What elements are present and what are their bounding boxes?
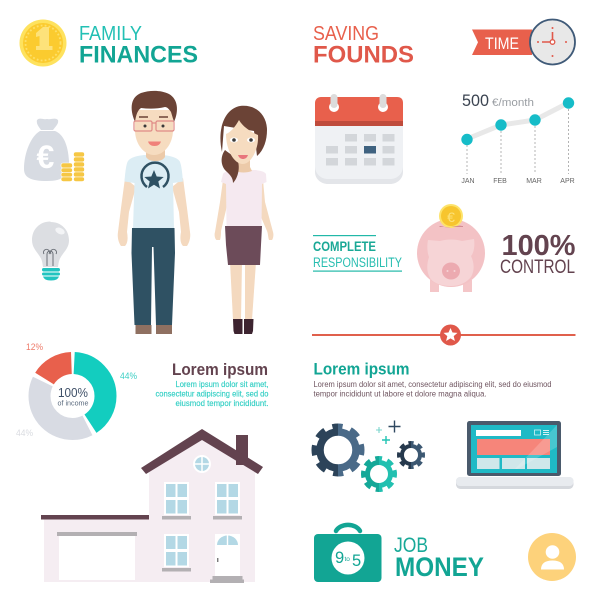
icon: piggy bank: €	[447, 209, 455, 225]
icon: piggy bank	[417, 204, 485, 292]
line chart: 500 euro per month: 500	[462, 92, 489, 110]
icon: gold coin	[20, 20, 66, 66]
text: complete responsibility: COMPLETE	[313, 239, 376, 254]
line chart: 500 euro per month: APR	[560, 178, 575, 185]
donut chart: income	[16, 342, 137, 438]
heading: family finances	[79, 22, 198, 68]
donut chart: income: of income	[58, 400, 89, 408]
windows	[164, 482, 240, 567]
door	[215, 534, 240, 576]
neck	[146, 145, 165, 161]
text: complete responsibility	[313, 235, 402, 272]
illustration: woman	[215, 106, 273, 334]
arms	[118, 178, 136, 246]
hair back and ponytail	[220, 106, 267, 156]
neck	[235, 155, 252, 172]
text block: lorem ipsum right aligned: Lorem ipsum dolor sit amet,	[176, 380, 268, 389]
heading: saving founds: FOUNDS	[313, 42, 414, 68]
heading: job money: JOB	[394, 534, 428, 557]
donut chart: income: 44%	[16, 428, 33, 438]
mouth	[148, 142, 161, 146]
icon: avatar	[528, 533, 576, 581]
donut chart: income: 12%	[26, 342, 43, 352]
text block: lorem ipsum left aligned	[314, 360, 552, 398]
icon: light bulb	[32, 222, 69, 280]
line chart: 500 euro per month	[461, 92, 575, 185]
ribbon: time	[472, 30, 532, 55]
top	[221, 170, 266, 227]
icon: money bag with coins: €	[36, 139, 54, 175]
text block: lorem ipsum right aligned: consectetur adipiscing elit, sed do	[156, 390, 269, 398]
line chart: 500 euro per month: FEB	[493, 178, 507, 185]
garage	[57, 532, 137, 536]
line chart: 500 euro per month: JAN	[461, 178, 475, 185]
heading: saving founds	[313, 22, 414, 68]
donut chart: income: 44%	[120, 371, 137, 381]
heading: job money	[394, 534, 484, 582]
glasses	[134, 121, 174, 131]
heading: family finances: FINANCES	[79, 42, 198, 68]
roof	[236, 435, 248, 465]
icon: money bag with coins	[24, 119, 84, 182]
text block: lorem ipsum right aligned: eiusmod tempor incididunt.	[176, 399, 268, 408]
heading: family finances: FAMILY	[79, 22, 142, 45]
round window	[193, 455, 211, 473]
icon: calendar	[315, 94, 403, 184]
text: 100% control: CONTROL	[500, 257, 575, 278]
eyes and lips	[230, 138, 255, 159]
line chart: 500 euro per month: MAR	[526, 178, 542, 185]
icon: briefcase 9 to 5: 5	[352, 552, 361, 570]
heading: saving founds: SAVING	[313, 22, 379, 45]
face	[226, 120, 258, 164]
text: 100% control	[500, 230, 576, 278]
text block: lorem ipsum left aligned: Lorem ipsum	[314, 360, 410, 378]
skirt	[225, 226, 262, 265]
divider with star badge	[312, 324, 576, 346]
icon: briefcase 9 to 5: to	[344, 556, 350, 563]
text block: lorem ipsum right aligned	[156, 361, 269, 408]
shirt star	[141, 163, 169, 188]
face	[135, 110, 173, 155]
icon: laptop	[456, 421, 574, 489]
icon: briefcase 9 to 5	[314, 525, 382, 582]
boots	[233, 319, 242, 334]
text: 100% control: 100%	[502, 230, 576, 262]
illustration: man	[118, 91, 190, 334]
hair	[132, 91, 177, 122]
shirt	[124, 155, 183, 228]
heading: job money: MONEY	[395, 552, 484, 582]
line chart: 500 euro per month: €/month	[492, 97, 534, 109]
text block: lorem ipsum right aligned: Lorem ipsum	[172, 361, 268, 379]
ribbon: time: TIME	[485, 34, 519, 53]
pants	[132, 228, 175, 325]
text: complete responsibility: RESPONSIBILITY	[313, 255, 402, 270]
icon: clock	[530, 20, 575, 64]
icon: gears	[316, 420, 422, 488]
text block: lorem ipsum left aligned: Lorem ipsum dolor sit amet, consectetur adipiscing elit, sed do eiusmod	[314, 380, 552, 389]
illustration: house	[41, 429, 263, 583]
text block: lorem ipsum left aligned: tempor incididunt ut labore et dolore magna aliqua.	[314, 390, 486, 398]
donut chart: income: 100%	[58, 386, 88, 400]
legs	[230, 262, 242, 320]
icon: briefcase 9 to 5: 9	[335, 549, 344, 567]
arms	[215, 180, 230, 240]
